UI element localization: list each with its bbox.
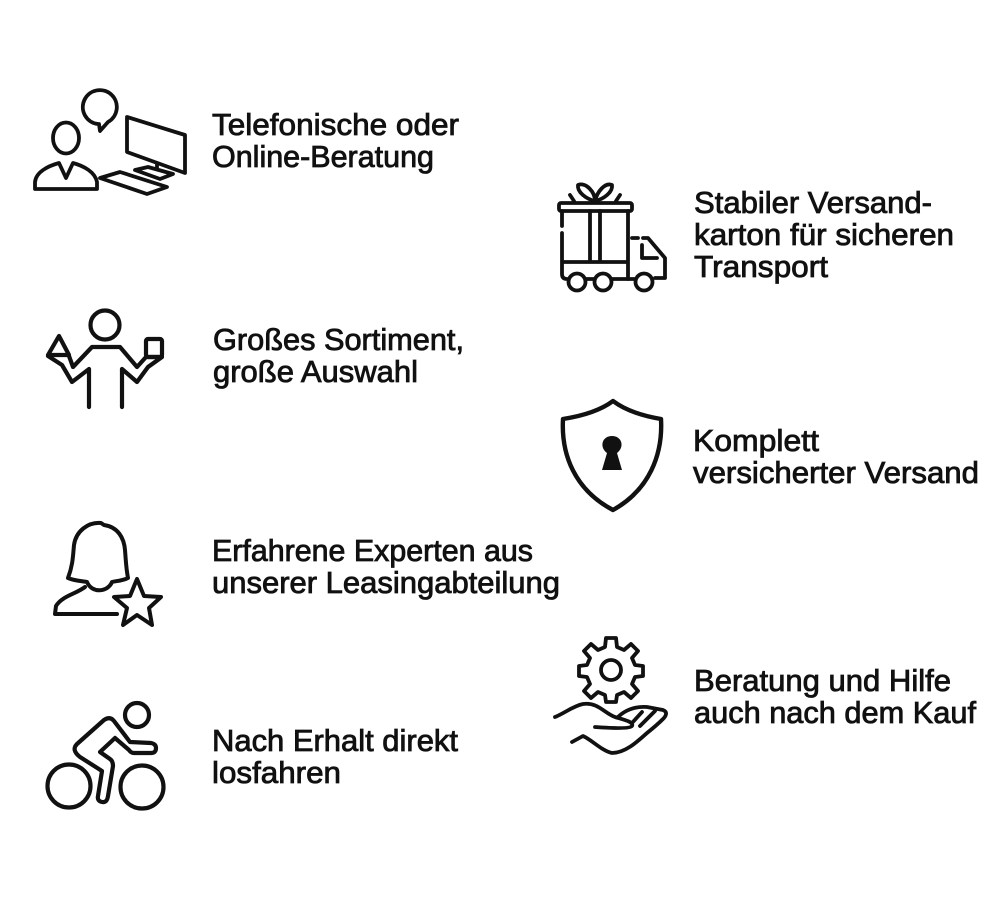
text: Großes Sortiment, große Auswahl: große Auswahl <box>213 354 418 389</box>
text: Nach Erhalt direkt losfahren: losfahren <box>212 755 341 790</box>
text: Großes Sortiment, große Auswahl: Großes Sortiment, <box>213 322 464 357</box>
icon: expert woman with star <box>55 523 161 625</box>
text: Erfahrene Experten aus unserer Leasingabteilung <box>212 533 560 600</box>
text: Beratung und Hilfe auch nach dem Kauf <box>694 663 976 730</box>
text: Komplett versicherter Versand: versicherter Versand <box>693 455 979 490</box>
text: Stabiler Versandkarton für sicheren Transport: Stabiler Versand- <box>694 185 932 220</box>
text: Stabiler Versandkarton für sicheren Transport: Transport <box>694 249 828 284</box>
text: Erfahrene Experten aus unserer Leasingabteilung: unserer Leasingabteilung <box>212 565 560 600</box>
text: Beratung und Hilfe auch nach dem Kauf: Beratung und Hilfe <box>694 663 951 698</box>
text: Nach Erhalt direkt losfahren <box>212 723 458 790</box>
icon: hand holding gear <box>555 638 666 753</box>
text: Stabiler Versandkarton für sicheren Transport <box>694 185 954 284</box>
icon: shield with keyhole <box>563 401 661 510</box>
text: Telefonische oder Online-Beratung <box>212 107 459 174</box>
text: Erfahrene Experten aus unserer Leasingabteilung: Erfahrene Experten aus <box>212 533 533 568</box>
text: Stabiler Versandkarton für sicheren Transport: karton für sicheren <box>694 217 954 252</box>
text: Nach Erhalt direkt losfahren: Nach Erhalt direkt <box>212 723 458 758</box>
text: Telefonische oder Online-Beratung: Online-Beratung <box>212 139 434 174</box>
text: Beratung und Hilfe auch nach dem Kauf: auch nach dem Kauf <box>694 695 976 730</box>
text: Großes Sortiment, große Auswahl <box>213 322 464 389</box>
icon: person at computer with speech bubble <box>35 90 185 194</box>
icon: cyclist <box>48 703 164 808</box>
icon: gift on delivery truck <box>559 184 665 290</box>
text: Komplett versicherter Versand: Komplett <box>693 423 819 458</box>
text: Telefonische oder Online-Beratung: Telefonische oder <box>212 107 459 142</box>
text: Komplett versicherter Versand <box>693 423 979 490</box>
icon: person weighing products <box>48 310 162 407</box>
